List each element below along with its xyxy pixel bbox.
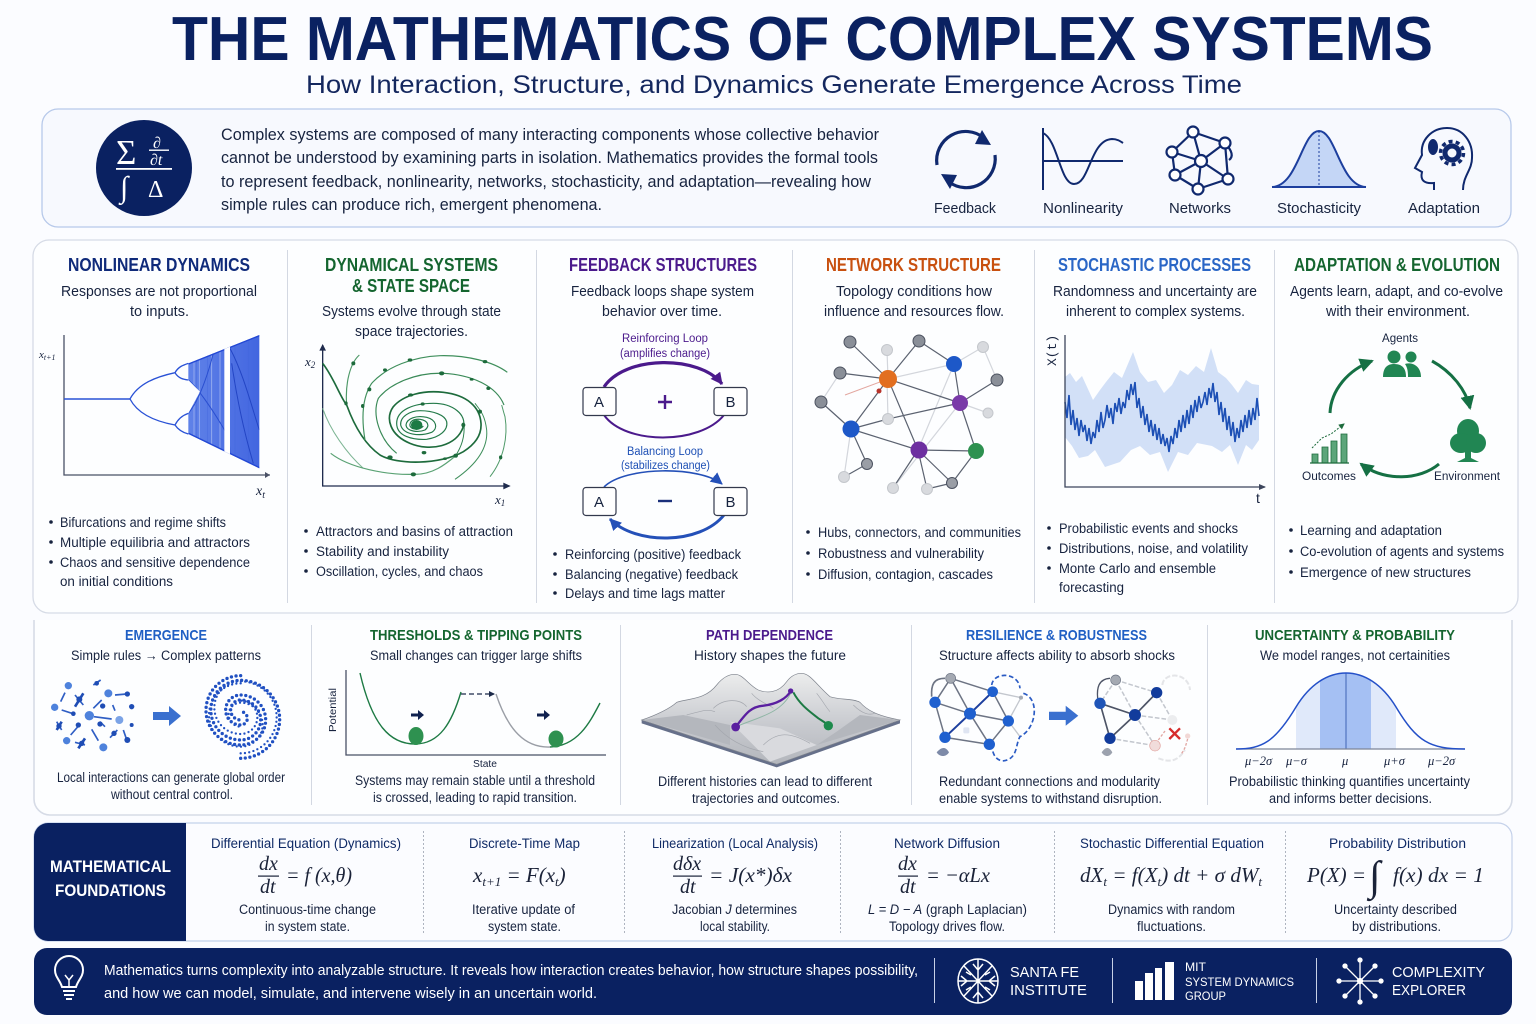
diagram: reinforcing loop: B xyxy=(726,394,736,411)
column: network structure xyxy=(806,255,1021,582)
equation: probability distribution: ∫ xyxy=(1366,854,1383,902)
bullets: Robustness and vulnerability xyxy=(818,546,984,561)
equation: stochastic differential equation xyxy=(1080,836,1264,934)
column: stochastic processes: Randomness and uncertainty are xyxy=(1053,284,1257,300)
equation: differential equation: dt xyxy=(260,876,276,898)
chart: stochastic time series: X(t) xyxy=(1045,335,1060,366)
bullets: on initial conditions xyxy=(60,574,173,589)
logo: MIT System Dynamics Group: SYSTEM DYNAMICS xyxy=(1185,975,1294,989)
illustration: spiral pattern xyxy=(206,676,280,758)
chart: normal distribution: μ−σ xyxy=(1285,754,1308,768)
icon: math symbols badge xyxy=(96,120,192,216)
icon: math symbols badge: Δ xyxy=(148,177,163,203)
diagram: balancing loop: Balancing Loop xyxy=(627,446,703,458)
equation: probability distribution: f(x) dx = 1 xyxy=(1393,863,1484,887)
equation: network diffusion: L = D − A (graph Laplacian) xyxy=(868,902,1027,917)
foundations label xyxy=(50,857,171,900)
section: uncertainty and probability: We model ranges, not certainities xyxy=(1260,648,1450,663)
logo: Complexity Explorer xyxy=(1337,958,1485,1004)
column: network structure: Topology conditions how xyxy=(836,284,993,300)
column: adaptation and evolution: Agents learn, adapt, and co-evolve xyxy=(1290,284,1503,300)
section: path dependence xyxy=(642,627,900,806)
equation: linearization xyxy=(652,836,818,934)
bullets xyxy=(49,515,250,589)
equation: linearization: local stability. xyxy=(700,919,770,934)
equation: probability distribution: Uncertainty described xyxy=(1334,902,1457,917)
panel: introduction xyxy=(42,109,1511,227)
equation: linearization: dδx xyxy=(673,853,701,875)
chart: potential landscape xyxy=(327,670,606,770)
section: thresholds and tipping points: is crossed, leading to rapid transition. xyxy=(373,790,577,805)
bullets xyxy=(553,547,741,601)
equation: discrete-time map: ) xyxy=(558,863,566,887)
diagram: balancing loop: B xyxy=(726,494,736,511)
icon: math symbols badge: ∂t xyxy=(150,152,163,169)
bullets xyxy=(304,524,513,579)
column: dynamical systems: DYNAMICAL SYSTEMS xyxy=(325,255,498,275)
bullets: Balancing (negative) feedback xyxy=(565,567,738,582)
bullets: Distributions, noise, and volatility xyxy=(1059,541,1248,556)
diagram: adaptation cycle: Agents xyxy=(1382,333,1418,345)
bullets: Diffusion, contagion, cascades xyxy=(818,567,993,582)
chart: bifurcation diagram: t xyxy=(262,490,265,501)
equation: differential equation: dx xyxy=(259,853,278,875)
icon: adaptation head xyxy=(1408,128,1480,217)
equation: stochastic differential equation: ) dt + σ dW xyxy=(1160,863,1261,887)
bullets: Learning and adaptation xyxy=(1300,523,1442,538)
chart: stochastic time series: t xyxy=(1256,490,1260,506)
diagram: adaptation cycle: Environment xyxy=(1434,471,1501,483)
chart: phase portrait spiral xyxy=(304,344,511,508)
icon: agents xyxy=(1383,350,1421,377)
logo: Santa Fe Institute: SANTA FE xyxy=(1010,964,1079,981)
chart: bifurcation diagram: x xyxy=(256,484,262,499)
section: resilience and robustness: RESILIENCE & ROBUSTNESS xyxy=(966,627,1147,644)
equation: stochastic differential equation: = f(X xyxy=(1107,863,1159,887)
equation: differential equation: Continuous-time change xyxy=(239,902,376,917)
column: dynamical systems: Systems evolve through state xyxy=(322,304,501,320)
chart: bifurcation diagram: x xyxy=(39,349,44,361)
subtitle: How Interaction, Structure, and Dynamics Generate Emergence Across Time xyxy=(306,71,1242,99)
bullets: Attractors and basins of attraction xyxy=(316,524,513,539)
equation: discrete-time map: system state. xyxy=(488,919,561,934)
column: feedback structures: FEEDBACK STRUCTURES xyxy=(569,255,757,275)
bullets: Reinforcing (positive) feedback xyxy=(565,547,741,562)
bullets xyxy=(1047,521,1248,595)
equation: linearization: dt xyxy=(680,876,696,898)
bullets: Chaos and sensitive dependence xyxy=(60,555,250,570)
section: resilience and robustness xyxy=(929,627,1190,806)
diagram: adaptation cycle xyxy=(1302,333,1501,483)
intro text: Complex systems are composed of many interacting components whose collective behavior xyxy=(221,126,879,144)
section: thresholds and tipping points: THRESHOLDS & TIPPING POINTS xyxy=(370,627,582,644)
chart: normal distribution: μ+σ xyxy=(1383,754,1406,768)
bullets: Multiple equilibria and attractors xyxy=(60,535,250,550)
section: thresholds and tipping points xyxy=(327,627,606,805)
bullets: Co-evolution of agents and systems xyxy=(1300,544,1504,559)
column: adaptation and evolution: with their environment. xyxy=(1325,304,1470,320)
diagram: reinforcing loop: A xyxy=(594,394,604,411)
bullets xyxy=(1289,523,1504,580)
equation: linearization: Jacobian J determines xyxy=(672,902,797,917)
section: path dependence: Different histories can lead to different xyxy=(658,774,872,789)
logo: MIT System Dynamics Group: MIT xyxy=(1185,960,1207,974)
bullets xyxy=(806,525,1021,582)
equation: probability distribution: Probability Distribution xyxy=(1329,836,1466,851)
column: feedback structures xyxy=(553,255,757,601)
section: path dependence: trajectories and outcomes. xyxy=(692,791,840,806)
equation: network diffusion: dx xyxy=(898,853,917,875)
column: stochastic processes: STOCHASTIC PROCESSES xyxy=(1058,255,1251,275)
icon: adaptation head: Adaptation xyxy=(1408,201,1480,217)
conclusion text xyxy=(104,963,918,1002)
equation: discrete-time map: t xyxy=(555,874,559,889)
column: adaptation and evolution xyxy=(1289,255,1504,580)
column: network structure: NETWORK STRUCTURE xyxy=(826,255,1001,275)
chart: bifurcation diagram: t+1 xyxy=(44,353,56,362)
column: nonlinear dynamics: Responses are not proportional xyxy=(61,284,257,300)
bullets: Emergence of new structures xyxy=(1300,565,1471,580)
bullets: forecasting xyxy=(1059,580,1124,595)
bullets: Stability and instability xyxy=(316,544,449,559)
foundations label: FOUNDATIONS xyxy=(55,881,166,900)
bullets: Probabilistic events and shocks xyxy=(1059,521,1238,536)
diagram: reinforcing loop: Reinforcing Loop xyxy=(622,333,708,345)
icon: feedback xyxy=(934,130,997,217)
chart: normal distribution: μ xyxy=(1341,754,1348,768)
panel: six core concepts xyxy=(33,240,1518,613)
chart: phase portrait spiral: 1 xyxy=(501,498,505,508)
diagram: balancing loop xyxy=(583,446,747,538)
bullets: Oscillation, cycles, and chaos xyxy=(316,564,483,579)
equation: stochastic differential equation: dX xyxy=(1080,863,1103,887)
equation: network diffusion xyxy=(868,836,1027,934)
logo: Santa Fe Institute: INSTITUTE xyxy=(1010,982,1087,999)
section: path dependence: History shapes the future xyxy=(694,648,846,663)
column: feedback structures: behavior over time. xyxy=(602,304,722,320)
icon: outcomes bars xyxy=(1310,424,1349,463)
banner: conclusion xyxy=(34,948,1512,1015)
chart: phase portrait spiral: x xyxy=(495,492,501,507)
diagram: balancing loop: (stabilizes change) xyxy=(621,460,710,472)
logo: MIT System Dynamics Group xyxy=(1135,960,1294,1003)
section: thresholds and tipping points: Systems may remain stable until a threshold xyxy=(355,773,595,788)
column: nonlinear dynamics: NONLINEAR DYNAMICS xyxy=(68,255,250,275)
column: stochastic processes xyxy=(1045,255,1266,595)
conclusion text: and how we can model, simulate, and intervene wisely in an uncertain world. xyxy=(104,986,597,1002)
icon: math symbols badge: ∫ xyxy=(118,171,130,206)
chart: normal distribution: μ−2σ xyxy=(1244,754,1273,768)
icon: stochasticity bell curve xyxy=(1272,131,1366,217)
section: path dependence: PATH DEPENDENCE xyxy=(706,627,833,644)
illustration: scattered agents xyxy=(51,680,134,751)
section: resilience and robustness: Structure affects ability to absorb shocks xyxy=(939,648,1175,663)
logo: MIT System Dynamics Group: GROUP xyxy=(1185,989,1226,1003)
column: feedback structures: Feedback loops shape system xyxy=(571,284,754,300)
chart: phase portrait spiral: 2 xyxy=(311,360,316,370)
title: THE MATHEMATICS OF COMPLEX SYSTEMS xyxy=(172,5,1433,74)
section: emergence: EMERGENCE xyxy=(125,627,207,644)
icon: feedback: Feedback xyxy=(934,201,997,217)
column: dynamical systems: & STATE SPACE xyxy=(352,276,470,296)
arrow xyxy=(153,706,181,726)
diagram: balancing loop: A xyxy=(594,494,604,511)
chart: bifurcation diagram xyxy=(38,330,270,501)
section: uncertainty and probability: Probabilistic thinking quantifies uncertainty xyxy=(1229,774,1470,789)
bullets: Bifurcations and regime shifts xyxy=(60,515,226,530)
equation: linearization: Linearization (Local Analysis) xyxy=(652,836,818,851)
equation: network diffusion: = −αLx xyxy=(926,863,991,887)
icon: math symbols badge: Σ xyxy=(116,133,136,172)
section: emergence: Simple rules → Complex patterns xyxy=(71,648,261,663)
column: stochastic processes: inherent to complex systems. xyxy=(1066,304,1245,320)
equation: discrete-time map xyxy=(469,836,580,934)
equation: network diffusion: Topology drives flow. xyxy=(889,919,1005,934)
intro text: cannot be understood by examining parts in isolation. Mathematics provides the formal tools xyxy=(221,149,878,167)
conclusion text: Mathematics turns complexity into analyzable structure. It reveals how interaction creates behavior, how structure shapes possibility, xyxy=(104,963,918,979)
chart: phase portrait spiral: x xyxy=(305,354,311,369)
intro text: simple rules can produce rich, emergent phenomena. xyxy=(221,196,602,214)
equation: linearization: = J(x*)δx xyxy=(709,863,793,887)
equation: discrete-time map: x xyxy=(473,863,482,887)
icon: light bulb xyxy=(55,956,83,999)
equation: stochastic differential equation: Dynamics with random xyxy=(1108,902,1235,917)
equation: probability distribution: by distributions. xyxy=(1352,919,1441,934)
icon: nonlinearity: Nonlinearity xyxy=(1043,201,1124,217)
chart: normal distribution xyxy=(1236,673,1465,768)
section: emergence xyxy=(51,627,285,802)
chart: normal distribution: μ−2σ xyxy=(1427,754,1456,768)
diagram: adaptation cycle: Outcomes xyxy=(1302,471,1356,483)
equation: stochastic differential equation: t xyxy=(1103,874,1107,889)
column: network structure: influence and resources flow. xyxy=(824,304,1004,320)
diagram: reinforcing loop: (amplifies change) xyxy=(620,348,710,360)
illustration: 3D terrain with paths xyxy=(642,673,900,767)
logo: Complexity Explorer: COMPLEXITY xyxy=(1392,964,1485,981)
diagram: reinforcing loop xyxy=(583,333,747,438)
section: thresholds and tipping points: Small changes can trigger large shifts xyxy=(370,648,582,663)
section: emergence: Local interactions can generate global order xyxy=(57,770,285,785)
bullets: Delays and time lags matter xyxy=(565,586,725,601)
intro text: to represent feedback, nonlinearity, networks, stochasticity, and adaptation—revealing how xyxy=(221,173,871,191)
icon: networks: Networks xyxy=(1169,201,1231,217)
equation: discrete-time map: Discrete-Time Map xyxy=(469,836,580,851)
column: adaptation and evolution: ADAPTATION & EVOLUTION xyxy=(1294,255,1500,275)
logo: Complexity Explorer: EXPLORER xyxy=(1392,982,1466,999)
equation: differential equation: Differential Equation (Dynamics) xyxy=(211,836,401,851)
equation: discrete-time map: = F(x xyxy=(501,863,556,887)
chart: stochastic time series xyxy=(1045,335,1266,506)
column: dynamical systems xyxy=(304,255,513,579)
icon: networks xyxy=(1166,126,1234,217)
equation: stochastic differential equation: t xyxy=(1158,874,1162,889)
icon: nonlinearity xyxy=(1043,128,1124,217)
equation: differential equation: in system state. xyxy=(265,919,350,934)
column: dynamical systems: space trajectories. xyxy=(355,324,468,340)
equation: stochastic differential equation: fluctuations. xyxy=(1137,919,1206,934)
bullets: Monte Carlo and ensemble xyxy=(1059,561,1216,576)
section: emergence: without central control. xyxy=(110,787,233,802)
equation: probability distribution xyxy=(1306,836,1484,934)
equation: network diffusion: Network Diffusion xyxy=(894,836,1000,851)
equation: stochastic differential equation: Stochastic Differential Equation xyxy=(1080,836,1264,851)
equation: network diffusion: dt xyxy=(900,876,916,898)
chart: network graph xyxy=(815,335,1003,494)
equation: discrete-time map: Iterative update of xyxy=(472,902,575,917)
bullets: Hubs, connectors, and communities xyxy=(818,525,1021,540)
equation: differential equation: = f (x,θ) xyxy=(286,863,352,887)
section: resilience and robustness: enable systems to withstand disruption. xyxy=(939,791,1162,806)
equation: discrete-time map: t+1 xyxy=(482,874,501,889)
column: nonlinear dynamics xyxy=(38,255,270,589)
equation: probability distribution: P(X) = xyxy=(1306,863,1366,887)
equation: stochastic differential equation: t xyxy=(1258,874,1262,889)
arrow xyxy=(1049,706,1078,726)
illustration: disrupted network xyxy=(1094,675,1190,761)
icon: stochasticity bell curve: Stochasticity xyxy=(1277,201,1362,217)
illustration: intact network xyxy=(929,673,1034,761)
section: uncertainty and probability xyxy=(1229,627,1470,806)
icon: environment tree xyxy=(1450,419,1486,462)
foundations label: MATHEMATICAL xyxy=(50,857,171,876)
section: resilience and robustness: Redundant connections and modularity xyxy=(939,774,1160,789)
column: nonlinear dynamics: to inputs. xyxy=(130,304,189,320)
logo: Santa Fe Institute xyxy=(958,959,1087,1003)
intro text xyxy=(221,126,879,214)
section: uncertainty and probability: and informs better decisions. xyxy=(1269,791,1432,806)
icon: math symbols badge: ∂ xyxy=(153,135,161,152)
chart: potential landscape: State xyxy=(473,759,497,770)
panel: mathematical foundations xyxy=(34,823,1512,941)
equation: differential equation xyxy=(211,836,401,934)
panel: emergent properties xyxy=(34,620,1512,815)
chart: potential landscape: Potential xyxy=(327,688,339,732)
section: uncertainty and probability: UNCERTAINTY & PROBABILITY xyxy=(1255,627,1455,644)
